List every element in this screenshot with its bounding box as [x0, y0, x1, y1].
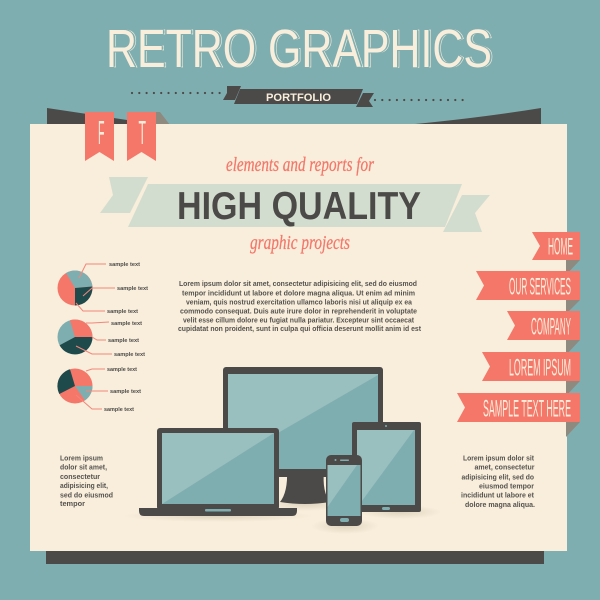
bookmark T: T	[138, 114, 146, 151]
body paragraph: veniam, quis nostrud exercitation ullamco laboris nisi ut aliquip ex ea	[186, 298, 413, 306]
body paragraph	[178, 279, 421, 333]
pie chart 2: sample text	[108, 338, 139, 344]
right text block: eiusmod tempor	[479, 482, 534, 490]
pie chart 1: sample text	[107, 309, 138, 315]
body paragraph: Lorem ipsum dolor sit amet, consectetur adipisicing elit, sed do eiusmod	[179, 279, 417, 288]
nav ribbon: company	[507, 311, 580, 340]
script line bottom: graphic projects	[250, 232, 350, 254]
right text block: dolore magna aliqua.	[465, 500, 535, 509]
left text block: dolor sit amet,	[60, 462, 107, 472]
dark back panel top	[47, 108, 541, 125]
title: RETRO GRAPHICS	[106, 19, 492, 79]
pie chart 3: sample text	[104, 407, 134, 413]
dotted line right	[375, 99, 466, 101]
right text block: Lorem ipsum dolor sit	[463, 454, 534, 462]
script line top: elements and reports for	[226, 154, 374, 176]
nav ribbon: home	[532, 232, 580, 260]
device shadows	[123, 497, 442, 534]
headline ribbon: HIGH QUALITY	[177, 185, 421, 228]
cream card	[30, 124, 567, 551]
pie chart 2: sample text	[111, 321, 142, 327]
pie chart 3: sample text	[107, 367, 137, 373]
title: RETRO GRAPHICS	[108, 19, 494, 79]
pie chart 1: sample text	[117, 286, 148, 292]
dark back panel bottom	[46, 550, 544, 564]
headline ribbon	[100, 177, 490, 232]
pie chart 3: sample text	[110, 389, 141, 395]
pie chart 1: sample text	[109, 262, 140, 268]
pie chart 2	[58, 319, 145, 358]
portfolio ribbon: PORTFOLIO	[266, 92, 331, 104]
body paragraph: cupidatat non proident, sunt in culpa qui officia deserunt mollit anim id est	[178, 324, 421, 333]
bookmark F: F	[98, 114, 104, 151]
right text block: incididunt ut labore et	[461, 490, 534, 500]
right text block: adipisicing elit, sed do	[462, 472, 534, 482]
left text block: Lorem ipsum	[60, 454, 103, 462]
left text block: tempor	[60, 499, 85, 508]
left text block: adipisicing elit,	[60, 481, 108, 490]
right text block: amet, consectetur	[474, 462, 535, 472]
left text block	[60, 454, 113, 508]
icon: smartphone	[326, 455, 362, 526]
title: RETRO GRAPHICS	[106, 19, 492, 79]
ribbon shadows on card edge	[566, 260, 580, 437]
icon: laptop	[139, 428, 297, 516]
icon: tablet	[352, 422, 421, 512]
pie chart 2: sample text	[114, 352, 145, 358]
body paragraph: tempor incididunt ut labore et dolore magna aliqua. Ut enim ad minim	[182, 288, 415, 298]
nav ribbon: our services	[476, 271, 580, 300]
pie chart 1	[58, 262, 148, 315]
left text block: sed do eiusmod	[60, 490, 113, 500]
nav ribbon: lorem ipsum	[482, 352, 580, 382]
portfolio ribbon	[223, 86, 374, 107]
pie chart 3	[57, 367, 141, 413]
icon: desktop monitor	[223, 367, 383, 504]
body paragraph: commodo consequat. Duis aute irure dolor in reprehenderit in voluptate	[180, 306, 417, 316]
right text block	[461, 454, 535, 509]
bookmark T	[127, 112, 156, 161]
body paragraph: velit esse cillum dolore eu fugiat nulla pariatur. Excepteur sint occaecat	[183, 316, 414, 324]
left text block: consectetur	[60, 472, 100, 481]
dotted line left	[132, 92, 222, 94]
nav ribbon: sample text here	[457, 393, 580, 422]
bookmark F	[85, 112, 114, 161]
